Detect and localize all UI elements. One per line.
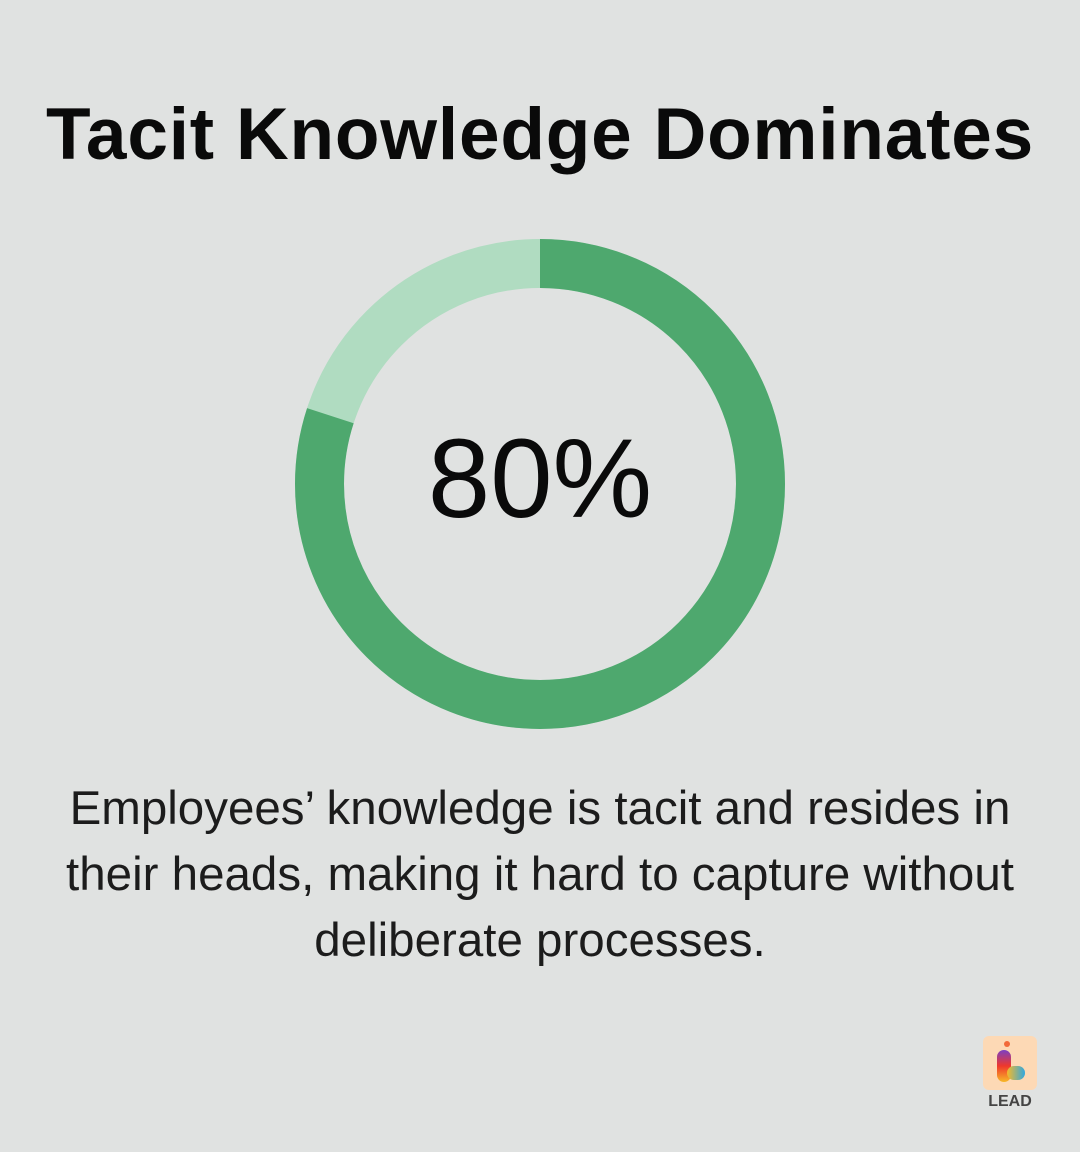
description text bbox=[66, 782, 1014, 967]
logo bbox=[983, 1036, 1037, 1110]
description text: deliberate processes. bbox=[314, 914, 766, 967]
title: Tacit Knowledge Dominates bbox=[46, 94, 1034, 175]
donut chart: 80% bbox=[428, 416, 652, 541]
logo: LEAD bbox=[988, 1093, 1032, 1110]
description text: their heads, making it hard to capture without bbox=[66, 848, 1014, 901]
description text: Employees’ knowledge is tacit and resides in bbox=[70, 782, 1010, 835]
